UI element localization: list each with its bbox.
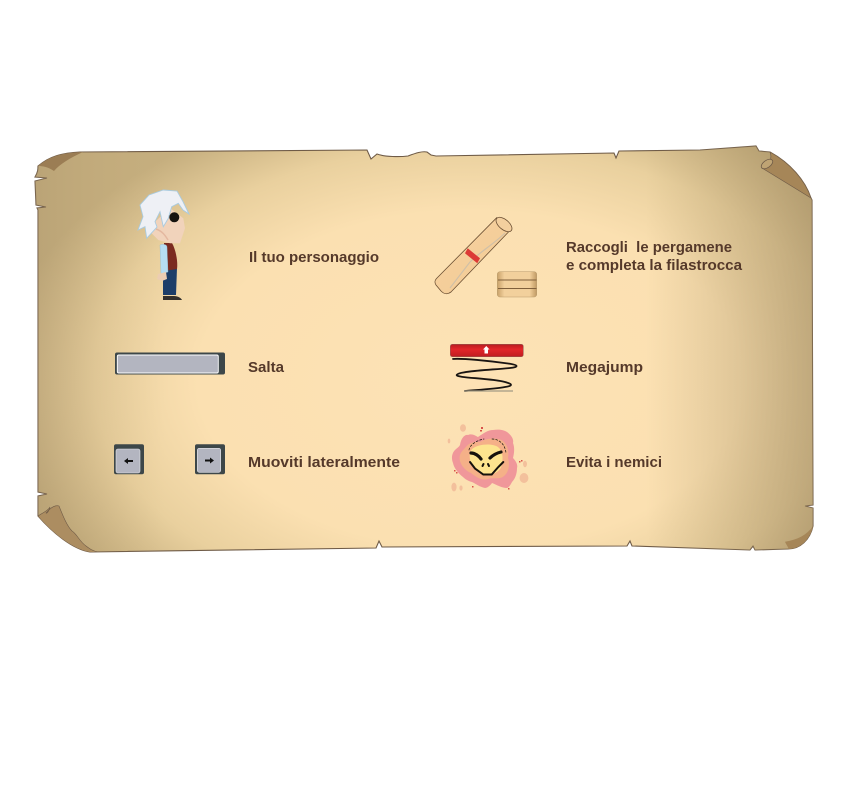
icon: space bar key [115, 352, 225, 374]
stacked parchment [497, 272, 537, 297]
curled corner: top left [38, 152, 83, 171]
character legs [163, 268, 177, 295]
instructions infographic [34, 145, 814, 552]
panel: parchment [30, 140, 820, 560]
character eye [169, 212, 179, 222]
label: jump: Salta [248, 359, 285, 376]
label: scrolls: Raccogli le pergamene [566, 239, 732, 256]
icon: character [138, 190, 189, 300]
character vest [164, 243, 177, 271]
curled corner: bottom right [785, 526, 813, 551]
spring platform [450, 344, 523, 357]
curled corner: bottom left [38, 506, 98, 553]
skull face [469, 439, 506, 474]
curled corner: top right [760, 152, 811, 198]
character sleeve [160, 244, 168, 274]
label: move: Muoviti lateralmente [248, 454, 400, 471]
icon: enemy skull [448, 424, 528, 491]
label: enemies: Evita i nemici [566, 454, 662, 471]
explosion cloud [452, 430, 517, 488]
rolled parchment [435, 218, 511, 294]
icon: right arrow key [195, 444, 225, 474]
character face [150, 208, 185, 243]
label: scrolls: e completa la filastrocca [566, 257, 743, 274]
character hair [138, 190, 189, 238]
icon: scroll [435, 215, 537, 297]
red ribbon [465, 248, 480, 263]
debris [448, 424, 528, 491]
character hand [157, 272, 167, 281]
label: megajump: Megajump [566, 359, 643, 376]
label: character: Il tuo personaggio [249, 249, 379, 266]
spring coil [452, 359, 517, 391]
character shoe [163, 296, 182, 300]
icon: left arrow key [114, 444, 144, 474]
icon: spring [450, 344, 523, 391]
sparks [454, 427, 522, 490]
